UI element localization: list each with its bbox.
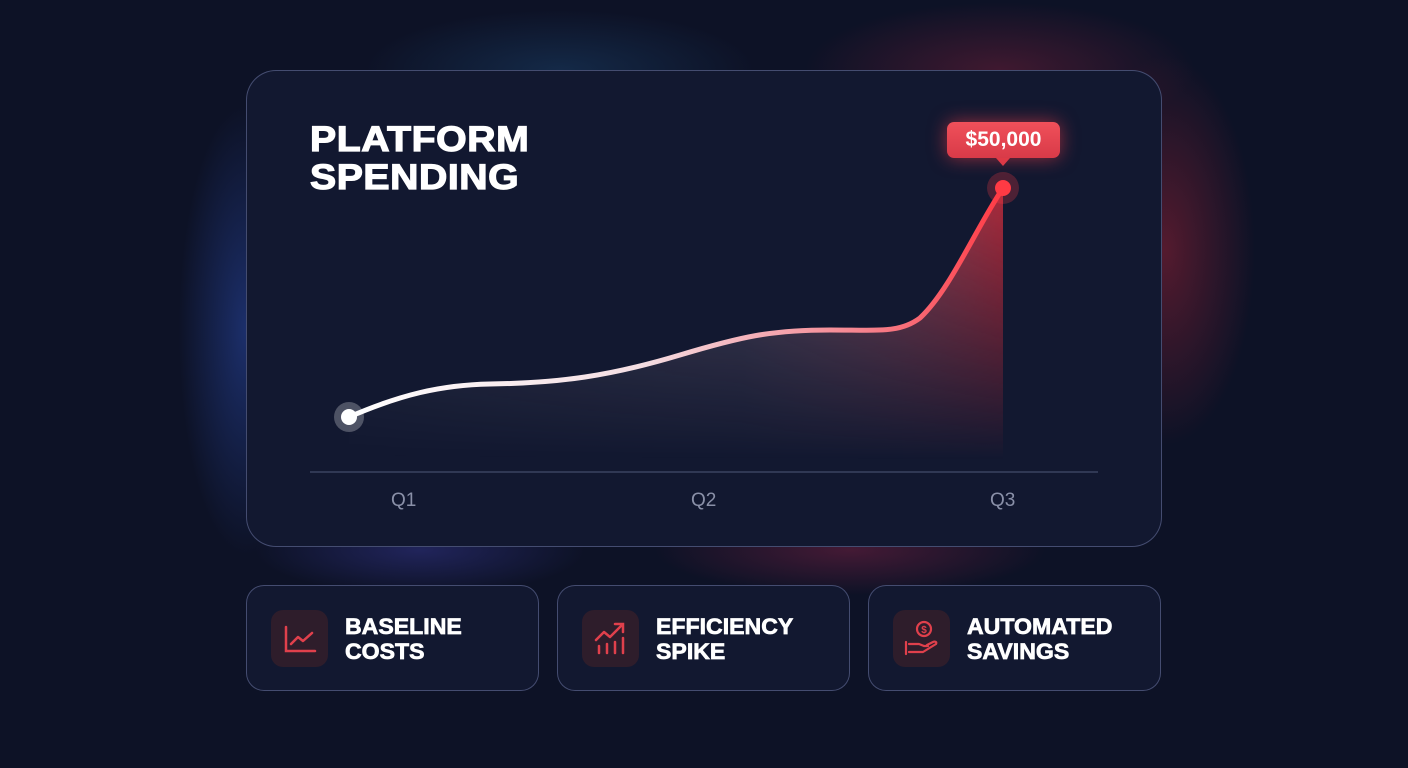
card: efficiency spike (557, 585, 850, 691)
card: automated savings (868, 585, 1161, 691)
card: baseline costs (246, 585, 539, 691)
callout: $50,000: $50,000 (966, 128, 1041, 151)
label (656, 614, 794, 664)
data point: Q3 peak (987, 172, 1019, 204)
label (967, 614, 1112, 664)
line chart (310, 158, 1098, 473)
icon: hand with coin: $ (921, 625, 927, 636)
data point: Q1 (334, 402, 364, 432)
axis label Q2: Q2 (691, 490, 716, 511)
label: SPIKE (656, 639, 725, 664)
label: BASELINE (345, 614, 462, 639)
label (345, 614, 462, 664)
label: COSTS (345, 639, 425, 664)
title (310, 120, 529, 197)
title: SPENDING (310, 158, 519, 197)
axis label Q3: Q3 (990, 490, 1015, 511)
icon: trending up bars (582, 610, 639, 667)
panel: chart (246, 70, 1162, 547)
axis label Q1: Q1 (391, 490, 416, 511)
icon: line chart (271, 610, 328, 667)
callout: $50,000 (947, 122, 1060, 158)
label: SAVINGS (967, 639, 1069, 664)
label: AUTOMATED (967, 614, 1112, 639)
icon: hand with coin (893, 610, 950, 667)
title: PLATFORM (310, 120, 529, 159)
label: EFFICIENCY (656, 614, 793, 639)
